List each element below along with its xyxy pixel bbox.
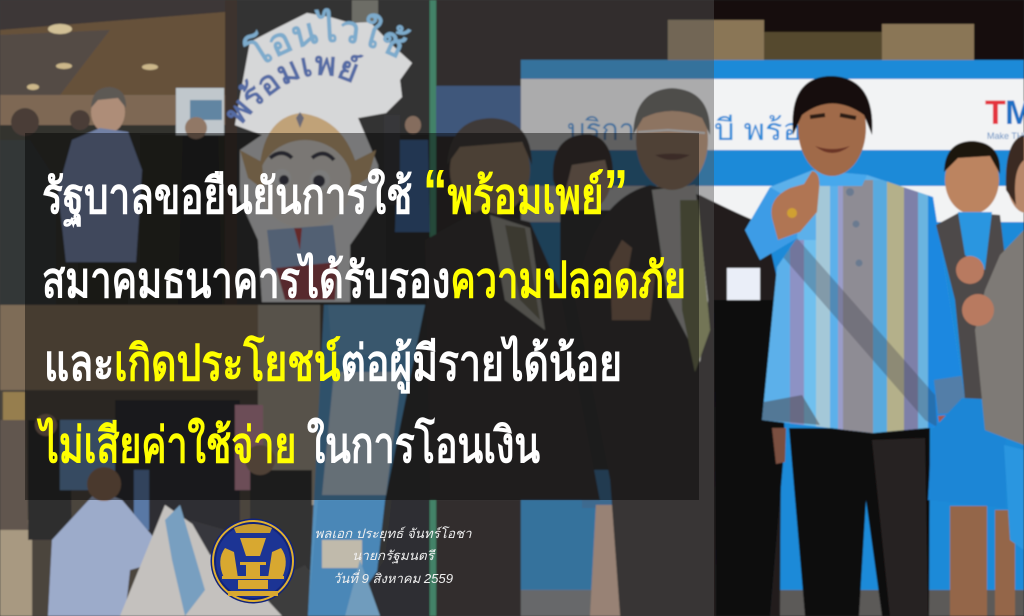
position: นายกรัฐมนตรี: [352, 548, 436, 564]
mascot with campaign sign: พร้อมเพย์: [226, 54, 364, 124]
silk jacket: [740, 165, 975, 440]
trousers of dark suit man: [714, 300, 785, 616]
sign lettering: โอนไวใช้: [242, 7, 412, 64]
attribution caption: [314, 526, 472, 586]
prime minister in blue silk jacket: [740, 76, 975, 616]
thumbs-up hand: [771, 171, 819, 240]
woman in grey jacket: [928, 141, 1015, 616]
left photo: hotel lobby with guests: [0, 0, 430, 616]
headline line 1: รัฐบาลขอยืนยันการใช้ “พร้อมเพย์”: [42, 158, 628, 228]
headline line 4: ไม่เสียค่าใช้จ่าย ในการโอนเงิน: [36, 416, 540, 473]
woman at right edge: [956, 135, 1024, 550]
man at left of booth: [425, 118, 600, 500]
trousers: [789, 428, 930, 616]
dim overlay on centre photo: [430, 0, 714, 616]
date: วันที่ 9 สิงหาคม 2559: [333, 569, 453, 586]
man with glasses: [575, 88, 782, 616]
head: [798, 80, 866, 176]
right photo: event backdrop: [425, 0, 1024, 616]
headline text: [36, 158, 686, 473]
government seal: [210, 518, 296, 604]
name: พลเอก ประยุทธ์ จันทร์โอชา: [314, 526, 472, 542]
dark text panel: [25, 133, 699, 500]
blue bank standee: [308, 305, 425, 616]
TMB logo: [985, 94, 1024, 141]
headline line 3: และเกิดประโยชน์ต่อผู้มีรายได้น้อย: [44, 334, 622, 394]
headline line 2: สมาคมธนาคารได้รับรองความปลอดภัย: [42, 251, 686, 308]
TMB logo: T: [985, 94, 1006, 132]
people behind green post: [384, 115, 430, 305]
woman behind: [553, 134, 644, 616]
guest in blue jacket: [58, 87, 142, 307]
booth banner text: บริกา: [567, 114, 635, 147]
right photo: event backdrop: บี พร้อ: [714, 114, 802, 147]
lower left booth scene: [0, 305, 430, 616]
mascot with campaign sign: [226, 7, 413, 304]
dim overlay on left photo: [0, 0, 430, 616]
